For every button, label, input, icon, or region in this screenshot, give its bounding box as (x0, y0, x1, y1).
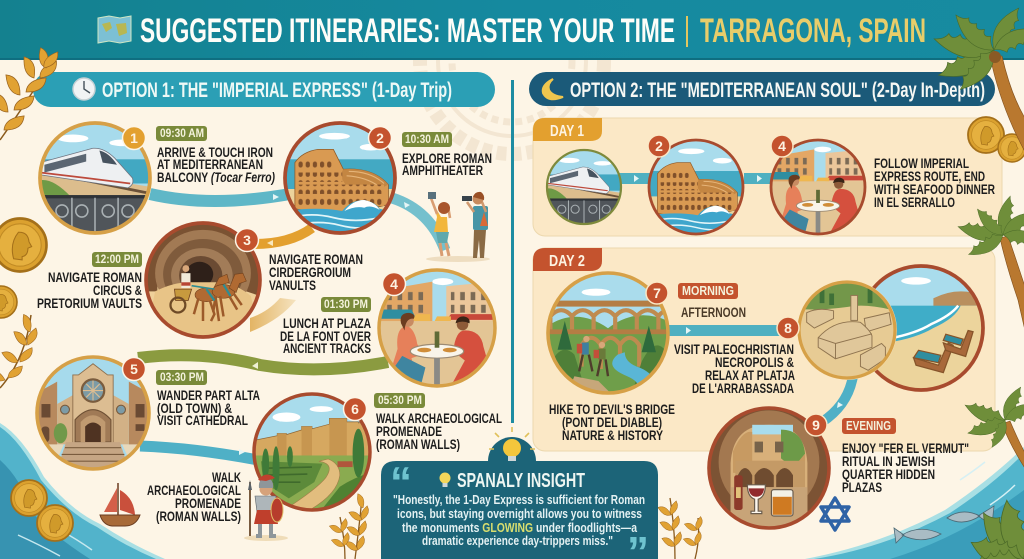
callout: spanaly insight (381, 427, 658, 559)
palm tree: top right (932, 4, 1024, 150)
stop 3 time and text, left: CIRCUS & (93, 283, 142, 298)
stop 7 text: HIKE TO DEVIL'S BRIDGE (549, 402, 675, 417)
stop 4 time and text: DE LA FONT OVER (280, 329, 371, 344)
badge 2: 2 (376, 130, 384, 146)
decoration: bottom right leaves (967, 498, 1024, 559)
palm tree: middle right (956, 195, 1024, 335)
badge 4: 4 (390, 276, 398, 292)
stop 6 time and text (374, 393, 502, 452)
stop 4 time and text: LUNCH AT PLAZA (283, 316, 371, 331)
connector day 1 (618, 173, 776, 184)
icon: sailboat (100, 483, 140, 526)
icon: gold coins, left (0, 218, 46, 318)
stop 5 time and text: (OLD TOWN) & (157, 401, 232, 416)
stop 3 text, right: CIRDERGROIUM (269, 265, 351, 280)
central divider (511, 80, 514, 423)
stop 6 text, left: ARCHAEOLOGICAL (147, 483, 241, 498)
stop 8 text (674, 342, 795, 396)
day 2 tab (533, 248, 602, 271)
icon: glowing lightbulb (488, 427, 536, 464)
badge 6: 6 (351, 401, 359, 417)
stop 4 illustration: plaza lunch (379, 270, 495, 386)
stop 6 time and text: PROMENADE (376, 424, 442, 439)
option 2 banner (529, 72, 995, 106)
stop 6 time and text: 05:30 PM (378, 393, 422, 407)
morning label: MORNING (682, 283, 734, 298)
opening quote: “ (390, 458, 412, 507)
day 1 illustration: train (547, 150, 621, 224)
stop 2 time and text: AMPHITHEATER (402, 163, 483, 178)
stop 6 text, left: PROMENADE (175, 496, 241, 511)
insight quote: the monuments GLOWING under floodlights—a (402, 521, 638, 535)
insight quote: dramatic experience day-trippers miss." (422, 534, 613, 548)
stop 9 text: ENJOY "FER EL VERMUT" (842, 441, 969, 456)
stop 1 time and text (156, 126, 275, 185)
stop 6 text, left: WALK (212, 470, 241, 485)
badge 3: 3 (243, 232, 251, 248)
stop 2 illustration: colosseum (285, 123, 395, 233)
stop 6 text, left: (ROMAN WALLS) (156, 509, 241, 524)
panel: day 1 (533, 118, 1002, 236)
badge day 1 stop 2 (648, 135, 670, 157)
stop 2 time and text (402, 132, 492, 178)
stop 7 text: NATURE & HISTORY (562, 428, 663, 443)
stop 3 time and text, left: NAVIGATE ROMAN (48, 270, 142, 285)
stop 6 time and text: (ROMAN WALLS) (376, 437, 460, 452)
day 2 tab: DAY 2 (549, 253, 585, 270)
stop 5 time and text: VISIT CATHEDRAL (157, 413, 248, 428)
day 2 illustration: jewish quarter courtyard (709, 408, 829, 528)
day 1 illustration: colosseum (649, 140, 743, 234)
stop 4 time and text: 01:30 PM (324, 297, 368, 311)
stop 6 text, left (147, 470, 241, 524)
stop 1 time and text: ARRIVE & TOUCH IRON (157, 145, 273, 160)
number badges (122, 126, 827, 436)
sea: bottom left (0, 423, 165, 559)
connector 2 to tourists (392, 198, 445, 250)
badge 1: 1 (130, 130, 138, 146)
badge 1 (122, 126, 146, 150)
day 2 illustration: beach (859, 266, 983, 390)
stop 1 time and text: 09:30 AM (160, 126, 204, 140)
day 1 text: EXPRESS ROUTE, END (874, 169, 985, 184)
badge 9 (805, 414, 827, 436)
insight quote: icons, but staying overnight allows you to witness (397, 507, 642, 521)
title: SUGGESTED ITINERARIES: MASTER YOUR TIME (140, 12, 675, 50)
connector 1 to 2 (150, 194, 290, 201)
day 1 text: IN EL SERRALLO (874, 195, 955, 210)
stop 2 time and text: 10:30 AM (405, 132, 449, 146)
badge 5 (122, 358, 146, 380)
icon: tourists taking photos (426, 192, 490, 262)
option 1 banner (33, 72, 495, 107)
badge 2 (368, 126, 392, 150)
stop 9 text: RITUAL IN JEWISH (842, 454, 935, 469)
connector 8 to 9 (822, 376, 853, 422)
badge 5: 5 (130, 361, 138, 377)
stop 3 time and text, left: PRETORIUM VAULTS (37, 296, 142, 311)
stop 7 text: (PONT DEL DIABLE) (562, 415, 662, 430)
day 1 tab (533, 118, 602, 141)
panel: day 2 (533, 248, 995, 451)
decoration: laurel mid left (0, 314, 41, 388)
connector 3 fade (250, 298, 296, 332)
decoration: wheat near insight, left (329, 494, 372, 559)
stop 3 text, right (269, 252, 363, 293)
stop 8 text: NECROPOLIS & (715, 355, 794, 370)
stop 1 time and text: AT MEDITERRANEAN (157, 157, 263, 172)
stop 5 time and text: WANDER PART ALTA (157, 388, 260, 403)
badge 6 (344, 398, 366, 420)
insight heading: SPANALY INSIGHT (457, 470, 585, 492)
stop 9 text: QUARTER HIDDEN (842, 467, 935, 482)
icon: gold coins, right (968, 117, 1024, 162)
stop 1 time and text: BALCONY (Tocar Ferro) (157, 170, 275, 185)
stop 5 time and text (156, 370, 260, 428)
afternoon label: AFTERNOON (681, 305, 746, 320)
badge day 1 stop 2: 2 (655, 138, 663, 154)
stop 8 text: DE L'ARRABASSADA (692, 381, 794, 396)
sea: bottom right (805, 447, 1024, 559)
stop 6 time and text: WALK ARCHAEOLOGICAL (376, 411, 502, 426)
insight quote (393, 493, 645, 548)
stop 1 illustration: train (40, 123, 150, 233)
stop 3 time and text, left (37, 252, 142, 311)
icon: moon (543, 79, 563, 99)
stop 3 time and text, left: 12:00 PM (95, 252, 139, 266)
stop 4 time and text (280, 297, 371, 356)
stop 5 illustration: cathedral (37, 357, 149, 469)
connector 2 to 3 (254, 228, 312, 246)
connector 5 to 6 (140, 446, 258, 460)
day 1 text: FOLLOW IMPERIAL (874, 156, 969, 171)
badge 9: 9 (812, 417, 820, 433)
connector 4 to 5 (138, 355, 388, 369)
icon: roman soldier (244, 474, 288, 541)
badge 3 (236, 228, 258, 252)
stop 8 text: RELAX AT PLATJA (705, 368, 795, 383)
badge day 1 stop 4: 4 (778, 138, 786, 154)
day 1 text (874, 156, 995, 210)
insight heading (440, 470, 585, 492)
title separator (686, 16, 688, 47)
stop 9 text: PLAZAS (842, 480, 882, 495)
badge 4 (382, 272, 406, 296)
icon: coins on the sea (11, 480, 73, 541)
badge day 1 stop 4 (771, 135, 793, 157)
badge 7: 7 (653, 285, 661, 301)
decoration: greek key medallion (420, 0, 604, 154)
icon: fish (894, 506, 994, 543)
icon: map (98, 16, 131, 43)
badge 8 (777, 317, 799, 339)
stop 4 time and text: ANCIENT TRACKS (283, 341, 371, 356)
decoration: wheat near insight, right (658, 498, 705, 559)
badge 8: 8 (784, 320, 792, 336)
palm tree: lower right (963, 385, 1024, 470)
day 1 tab: DAY 1 (550, 123, 584, 140)
stop 6 illustration: roman walls (254, 394, 370, 510)
stop 9 text (842, 441, 969, 495)
evening label: EVENING (846, 418, 891, 433)
stop 8 text: VISIT PALEOCHRISTIAN (674, 342, 794, 357)
icon: star of david (821, 498, 849, 530)
insight quote: "Honestly, the 1-Day Express is sufficient for Roman (393, 493, 645, 507)
day 2 illustration: necropolis (797, 280, 897, 380)
icon: clock (73, 78, 95, 100)
header bar (0, 0, 1024, 60)
badge 7 (646, 282, 668, 304)
stop 2 time and text: EXPLORE ROMAN (402, 151, 492, 166)
stop 3 text, right: VANULTS (269, 278, 316, 293)
stop 7 text (549, 402, 675, 443)
option 1 banner: OPTION 1: THE "IMPERIAL EXPRESS" (1-Day Trip) (102, 79, 452, 102)
day 1 illustration: plaza (771, 140, 865, 234)
decoration: laurel top left (0, 48, 62, 140)
stop 5 time and text: 03:30 PM (160, 370, 204, 384)
stop 3 text, right: NAVIGATE ROMAN (269, 252, 363, 267)
day 2 illustration: devil's bridge (548, 273, 673, 393)
connector 7 to 8 (668, 325, 786, 336)
stop 3 illustration: tunnel and chariot (146, 223, 260, 337)
